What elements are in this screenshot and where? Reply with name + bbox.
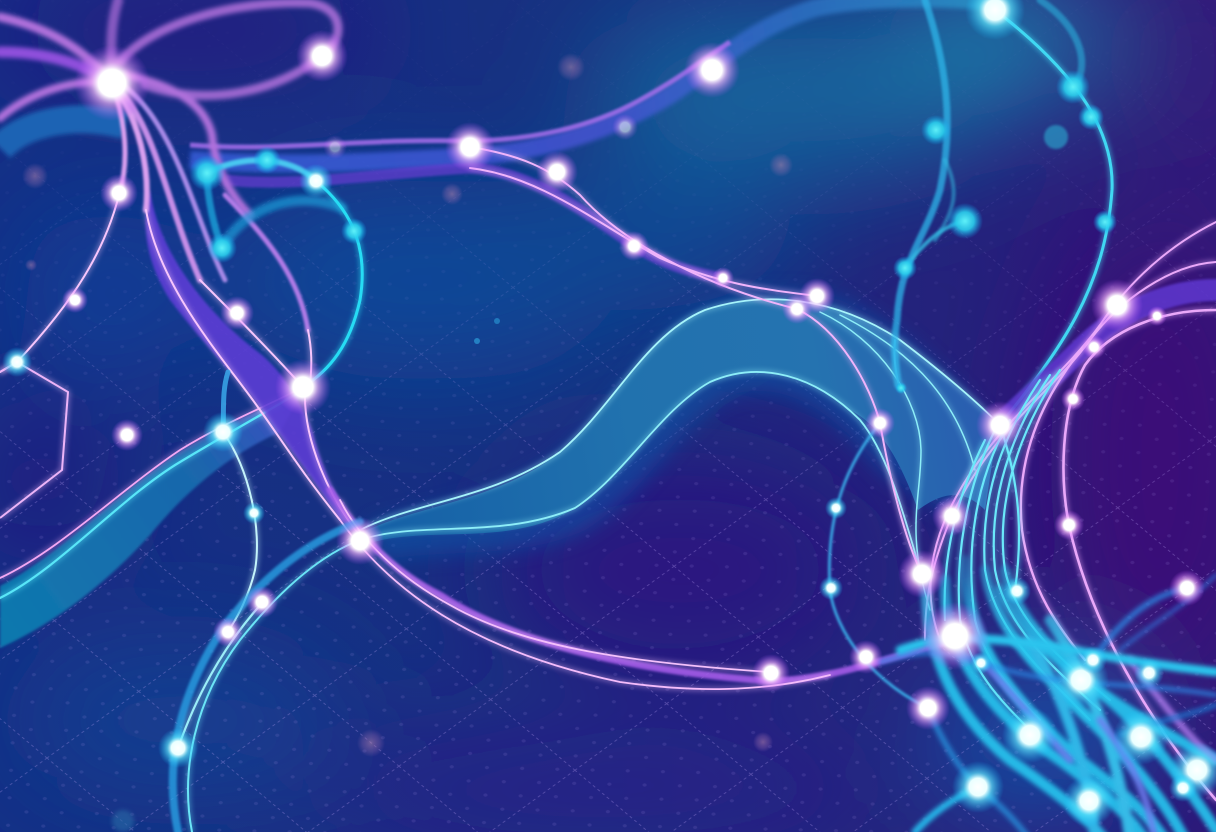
lines: teal arc lower-left: [173, 522, 360, 832]
band: upper ribbon: [0, 0, 1000, 278]
lines: right purple and teal bundle: [880, 222, 1216, 832]
lines: purple stream across the top: [470, 147, 922, 574]
lines: central ribbon edges: [360, 299, 1000, 610]
lines: teal streams upper right: [829, 0, 1112, 708]
lines: purple bundle from upper-left hub: [0, 0, 360, 535]
band: central teal ribbon: [365, 293, 1000, 560]
band: lower-left teal ribbon: [0, 390, 303, 648]
nodes: solid teal dots: [189, 70, 1117, 394]
lines: hexagon outline left: [0, 362, 68, 518]
nodes: large white-pink glows: [62, 30, 1205, 730]
lines: long sweep along the bottom: [330, 490, 955, 689]
lines: lower-left ribbon edges: [0, 387, 303, 598]
lines: teal loop upper-left: [207, 160, 362, 632]
lines: blurred foreground cyan strands: [925, 560, 1216, 832]
